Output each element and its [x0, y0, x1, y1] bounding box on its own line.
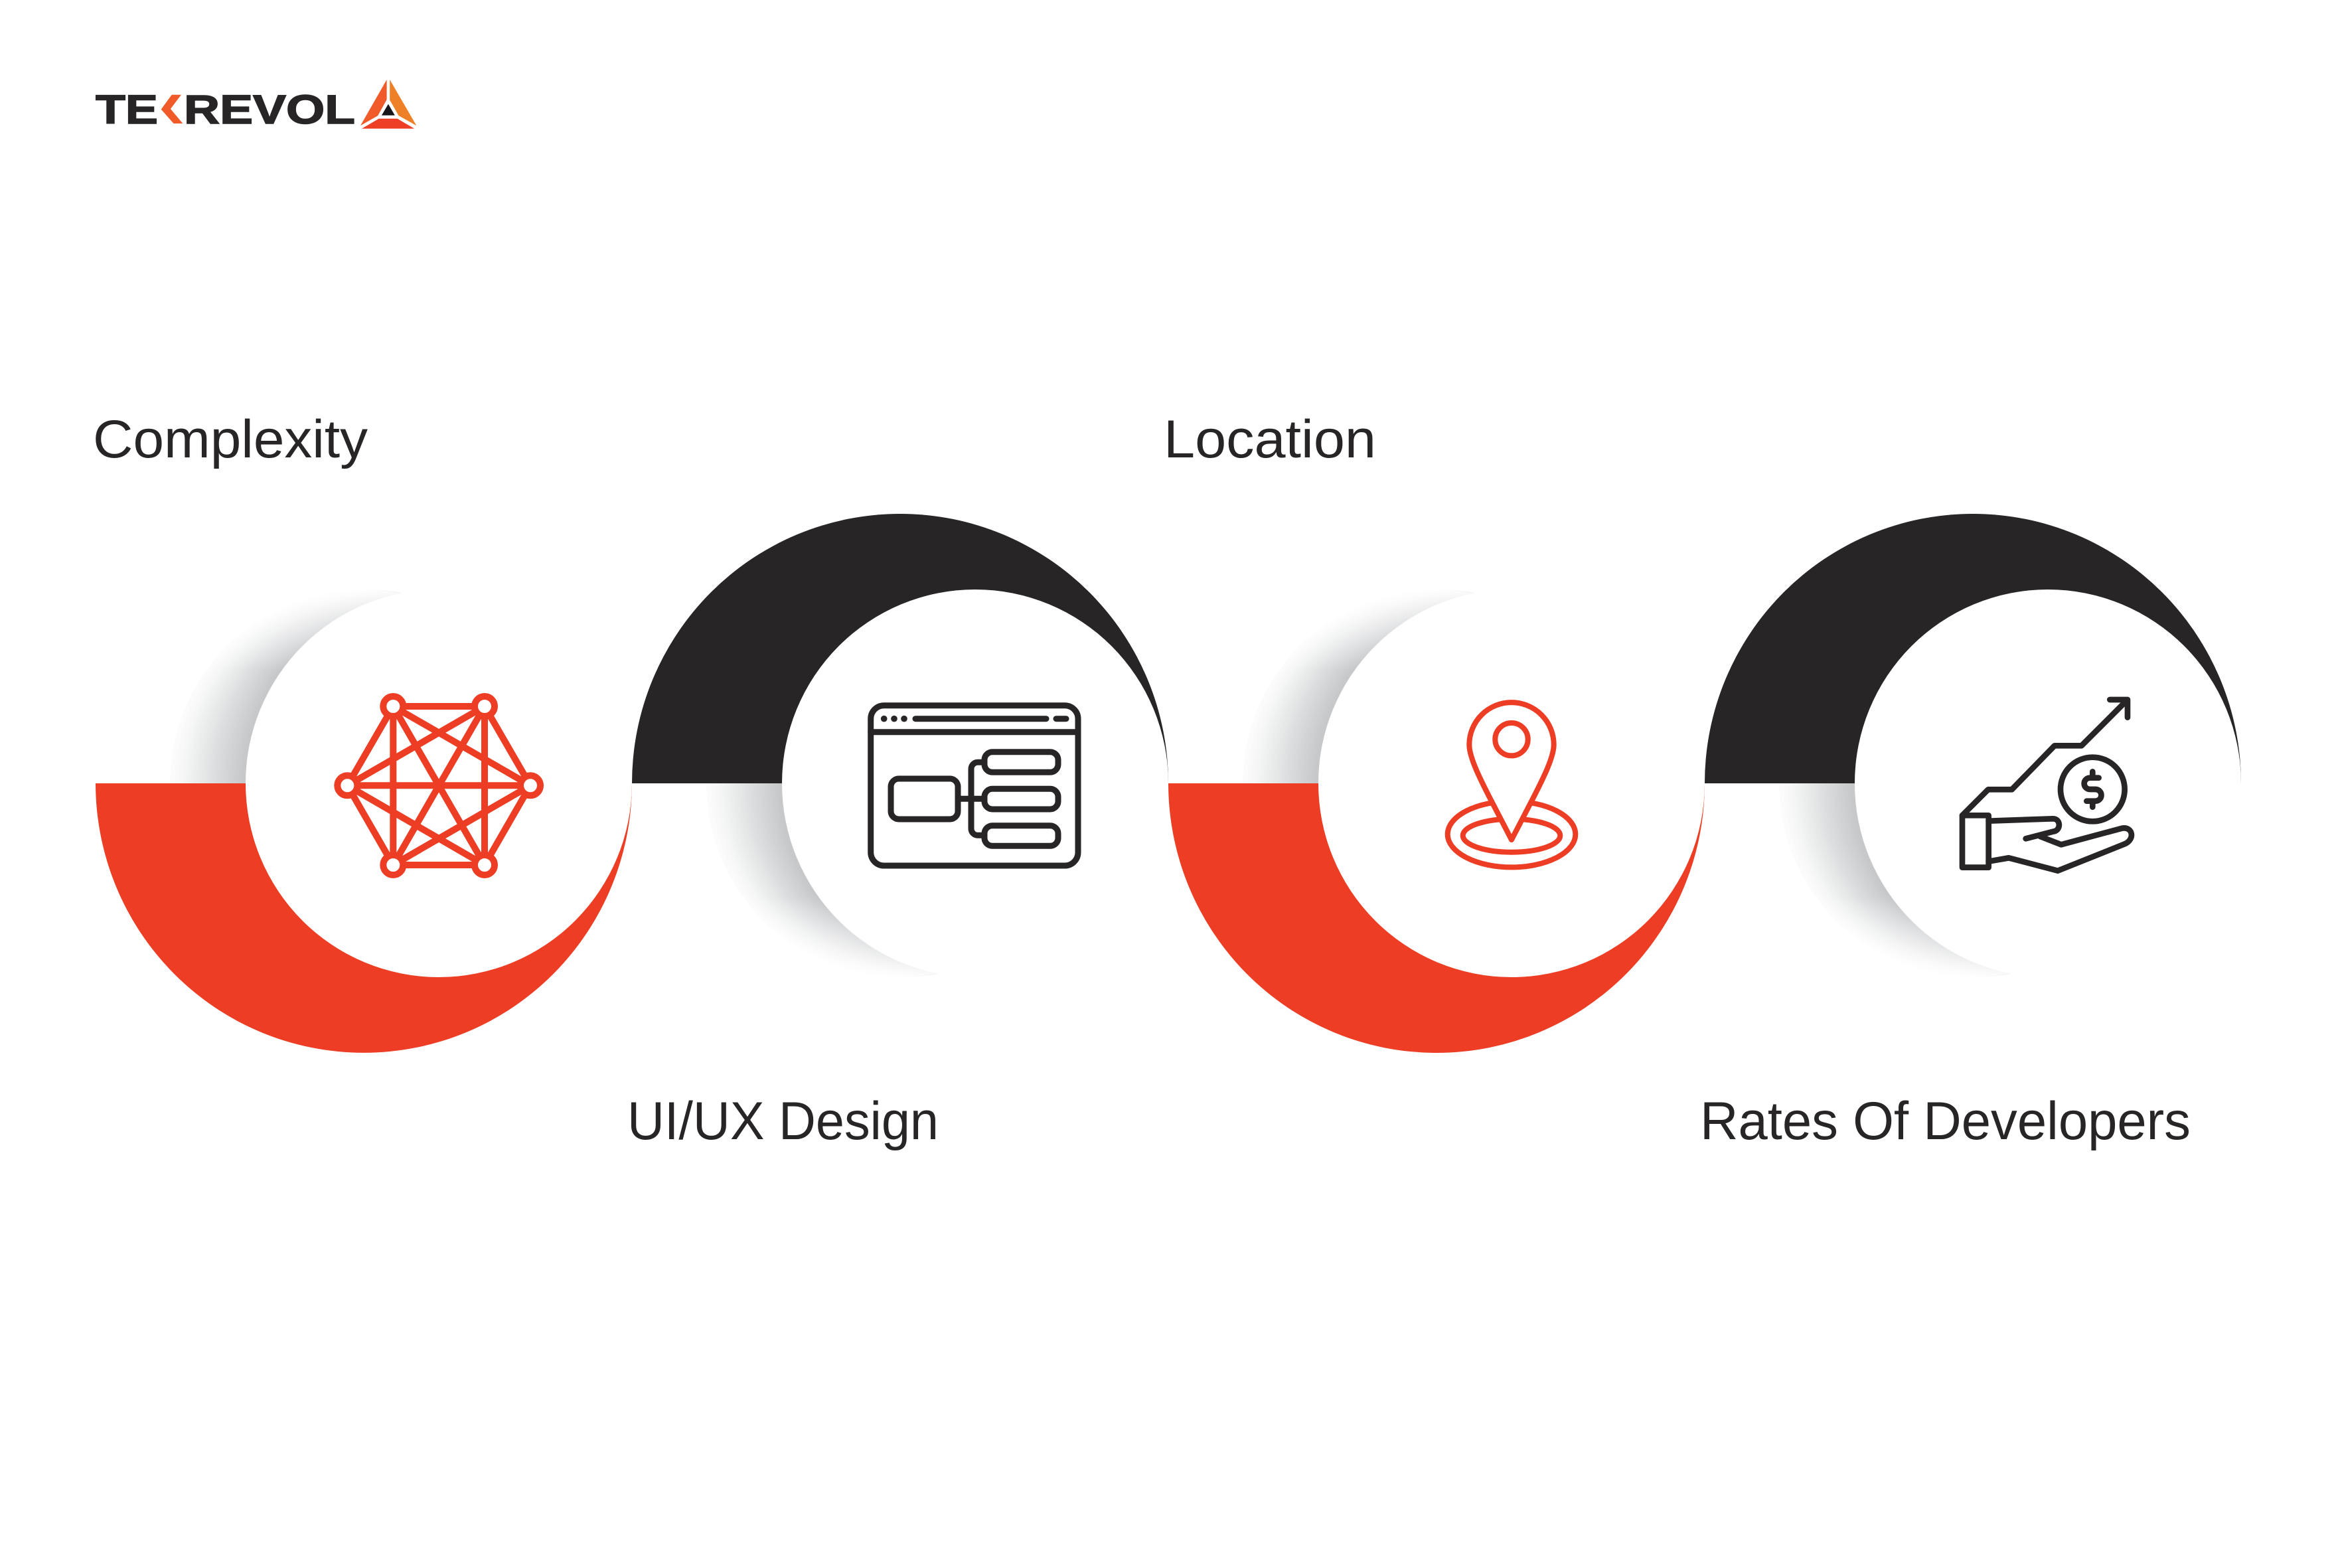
icon: hand, coin and rising arrow	[1962, 700, 2132, 871]
shadow crescent	[183, 589, 401, 783]
logo: Tekrevol: REVOL	[184, 87, 355, 132]
red crescent	[1168, 783, 1705, 1053]
white disc	[246, 589, 632, 977]
black crescent	[1705, 514, 2241, 783]
step 4: rates of developers	[1700, 514, 2241, 1151]
heading: Rates Of Developers: Rates Of Developers	[1700, 1091, 2191, 1151]
shadow crescent	[720, 783, 937, 977]
white disc	[1318, 589, 1705, 977]
black crescent	[632, 514, 1168, 783]
icon: network	[337, 696, 540, 875]
white disc	[782, 589, 1168, 977]
step 1: complexity	[93, 410, 632, 1053]
logo: Tekrevol	[96, 80, 416, 132]
icon: browser sitemap	[871, 706, 1078, 866]
heading: Location: Location	[1164, 410, 1376, 469]
white disc	[1855, 589, 2241, 977]
heading: UI/UX Design: UI/UX Design	[627, 1091, 939, 1151]
logo: Tekrevol: TE	[96, 87, 158, 132]
heading: Complexity: Complexity	[93, 410, 368, 469]
step 2: UI/UX design	[627, 514, 1168, 1151]
icon: map pin	[1448, 702, 1575, 867]
red crescent	[96, 783, 632, 1053]
shadow crescent	[1792, 783, 2010, 977]
shadow crescent	[1256, 589, 1474, 783]
step 3: location	[1164, 410, 1705, 1053]
